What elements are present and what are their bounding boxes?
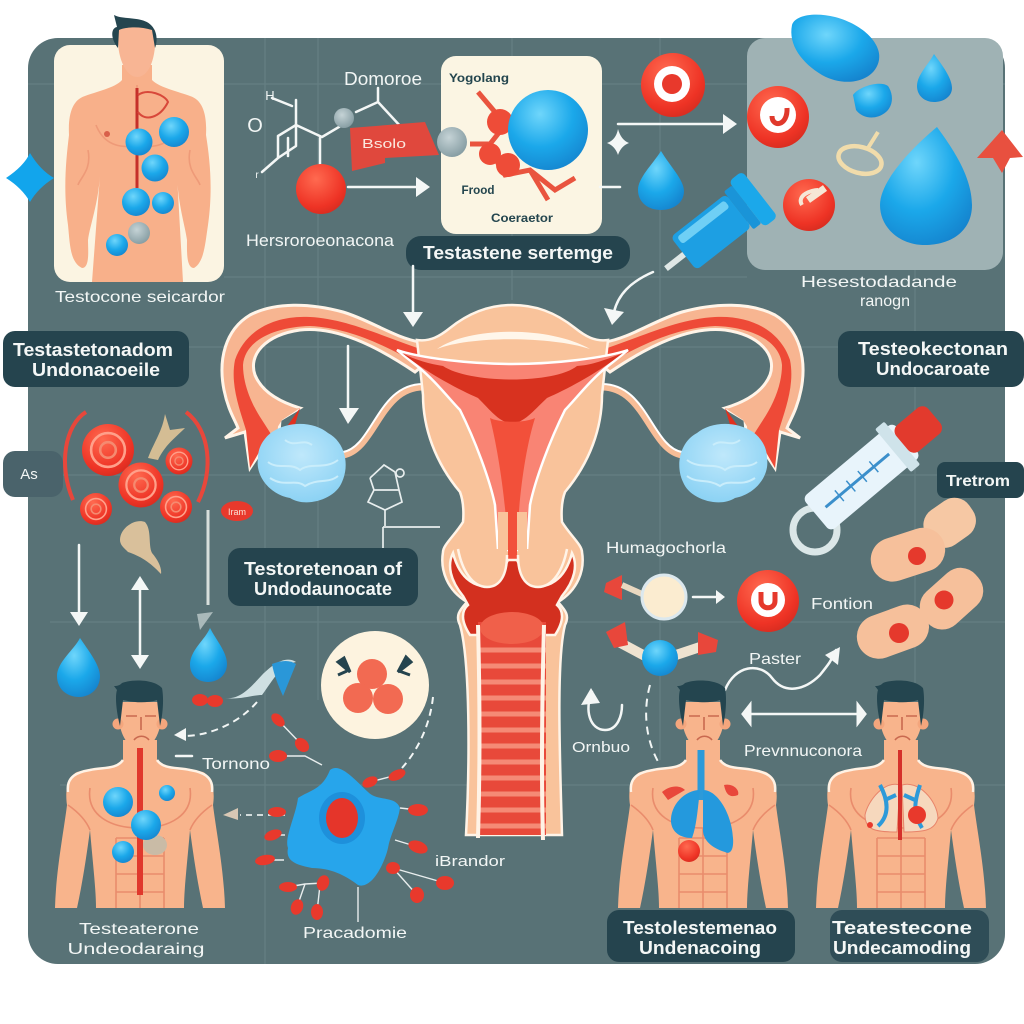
pill: tretrom label: Tretrom: [946, 473, 1010, 490]
pill: right man two label: [830, 910, 989, 962]
pill: right label: Undocaroate: [876, 359, 990, 379]
label: top right caption: [801, 274, 957, 310]
icon: tendril with red bean: [192, 660, 296, 707]
pill: testastene: [406, 236, 630, 270]
arrow: dashed from circle: [402, 697, 433, 768]
label: top right caption: Hesestodadande: [801, 274, 957, 291]
pill: testastene: Testastene sertemge: [423, 243, 613, 263]
pill: right man one label: [607, 910, 795, 962]
arrow: double horizontal: [743, 705, 865, 723]
icon: blue vial: [648, 171, 778, 291]
pill: right man two label: Teatestecone: [832, 918, 972, 938]
icon: beige tendril: [120, 521, 161, 574]
panel: molecule card: [441, 56, 602, 234]
pill: right label: Testeokectonan: [858, 339, 1008, 359]
icon: blue connector: [606, 622, 718, 676]
arrow: curved down to uterus: [604, 272, 653, 325]
pill: center label: Testoretenoan of: [244, 559, 403, 579]
body of uterus: [417, 305, 608, 835]
arrow: dashed arc: [646, 685, 660, 765]
label: tornono: [176, 756, 270, 773]
panel: right syringe: [793, 395, 952, 552]
arrow: down to uterus: [403, 266, 423, 327]
pill: right man two label: Undecamoding: [833, 938, 971, 958]
pill: center label: Undodaunocate: [254, 579, 392, 599]
icon: red target: [641, 53, 705, 117]
icon: right blue drop: [190, 628, 227, 682]
fundus highlight: [437, 332, 590, 349]
arrow: to red target: [693, 590, 725, 604]
figure: lower left man: [55, 680, 225, 908]
uterine cavity: [397, 350, 628, 550]
arrow: dashed to man: [223, 808, 285, 820]
icon: blue drop: [638, 151, 684, 210]
figure: blue cell with dumbbells: [254, 711, 454, 922]
cervix: [450, 553, 575, 635]
label: brandor: iBrandor: [435, 853, 505, 870]
pill: left label: [3, 331, 189, 387]
red receptors: [254, 711, 454, 922]
panel: molecule card: Yogolang: [449, 73, 509, 85]
chart: molecule diagram: O: [247, 115, 263, 137]
label: ornbuo: Ornbuo: [572, 739, 630, 756]
arrow: wavy: [725, 647, 840, 690]
icon: red star: [977, 130, 1023, 173]
arrow: down to ovary: [339, 346, 359, 424]
label: humagochorla: Humagochorla: [606, 540, 726, 557]
anatomy: uterus illustration: [222, 305, 803, 840]
label: tornono: Tornono: [202, 756, 270, 773]
icon: peach capsules: [851, 491, 991, 665]
figure: right man two with organs: [816, 680, 986, 908]
panel: grey box with capsules: [747, 15, 1003, 270]
pill: right label: [838, 331, 1024, 387]
pill: left label: Undonacoeile: [32, 360, 160, 380]
arrow: u turn: [581, 688, 622, 730]
figure: right man one with lungs: [618, 680, 788, 908]
pill: as label: [3, 451, 63, 497]
red tag: Bsolo: [362, 136, 406, 151]
panel: molecule card: Coeraetor: [491, 213, 554, 225]
chart: molecule diagram: [247, 88, 439, 214]
arrow: left down: [70, 545, 88, 626]
pill: right man one label: Testolestemenao: [623, 918, 777, 938]
icon: molecule node: [396, 469, 404, 477]
ligament: [343, 387, 425, 455]
icon: red U target: [737, 570, 799, 632]
arrow: double vertical: [131, 576, 149, 669]
pill: left label: Testastetonadom: [13, 340, 173, 360]
icon: small red tag: Iram: [228, 507, 246, 517]
label: fontion: Fontion: [811, 596, 873, 613]
arrow: faded down: [197, 510, 213, 630]
label: prevnnuconora: Prevnnuconora: [744, 743, 862, 760]
panel: top left body card: [54, 15, 224, 282]
label: pracadomie: Pracadomie: [303, 925, 407, 942]
icon: blue diamond: [6, 153, 54, 202]
pill: right man one label: Undenacoing: [639, 938, 761, 958]
red tag: [350, 122, 439, 171]
arrow: to grey panel: [607, 114, 737, 155]
chart: molecule diagram: r: [255, 170, 259, 181]
arrow: dashed curve: [174, 702, 257, 741]
pill: as label: As: [20, 466, 38, 483]
arrow: [348, 186, 420, 188]
label: domoroe: Domoroe: [344, 69, 422, 89]
label: lower left caption: Testeaterone: [79, 921, 199, 938]
icon: cream circle with red cluster: [321, 631, 429, 739]
figure: male torso with blue spheres: [65, 15, 211, 282]
label: body card caption: Testocone seicardor: [55, 289, 226, 306]
left tube and ovary: [222, 305, 440, 502]
icon: left blue drop: [57, 638, 100, 697]
label: paster: Paster: [749, 651, 802, 668]
pill: tretrom label: [937, 462, 1024, 498]
label: hersroroe: Hersroroeonacona: [246, 231, 395, 250]
group: red cells: [65, 412, 208, 525]
arrow: small pointer: [600, 186, 620, 188]
ovary: [258, 424, 346, 502]
pill: center label: [228, 548, 418, 606]
icon: hexagon molecule: [368, 465, 440, 548]
icon: small red tag: [221, 501, 253, 521]
label: lower left caption: [68, 921, 204, 958]
canal: [478, 622, 546, 835]
chart: molecule diagram: H: [265, 88, 275, 103]
icon: grey bead: [437, 127, 467, 157]
icon: cream dial: [604, 575, 686, 619]
label: top right caption: ranogn: [860, 293, 910, 310]
panel: molecule card: Frood: [462, 185, 494, 197]
label: lower left caption: Undeodaraing: [68, 941, 204, 958]
